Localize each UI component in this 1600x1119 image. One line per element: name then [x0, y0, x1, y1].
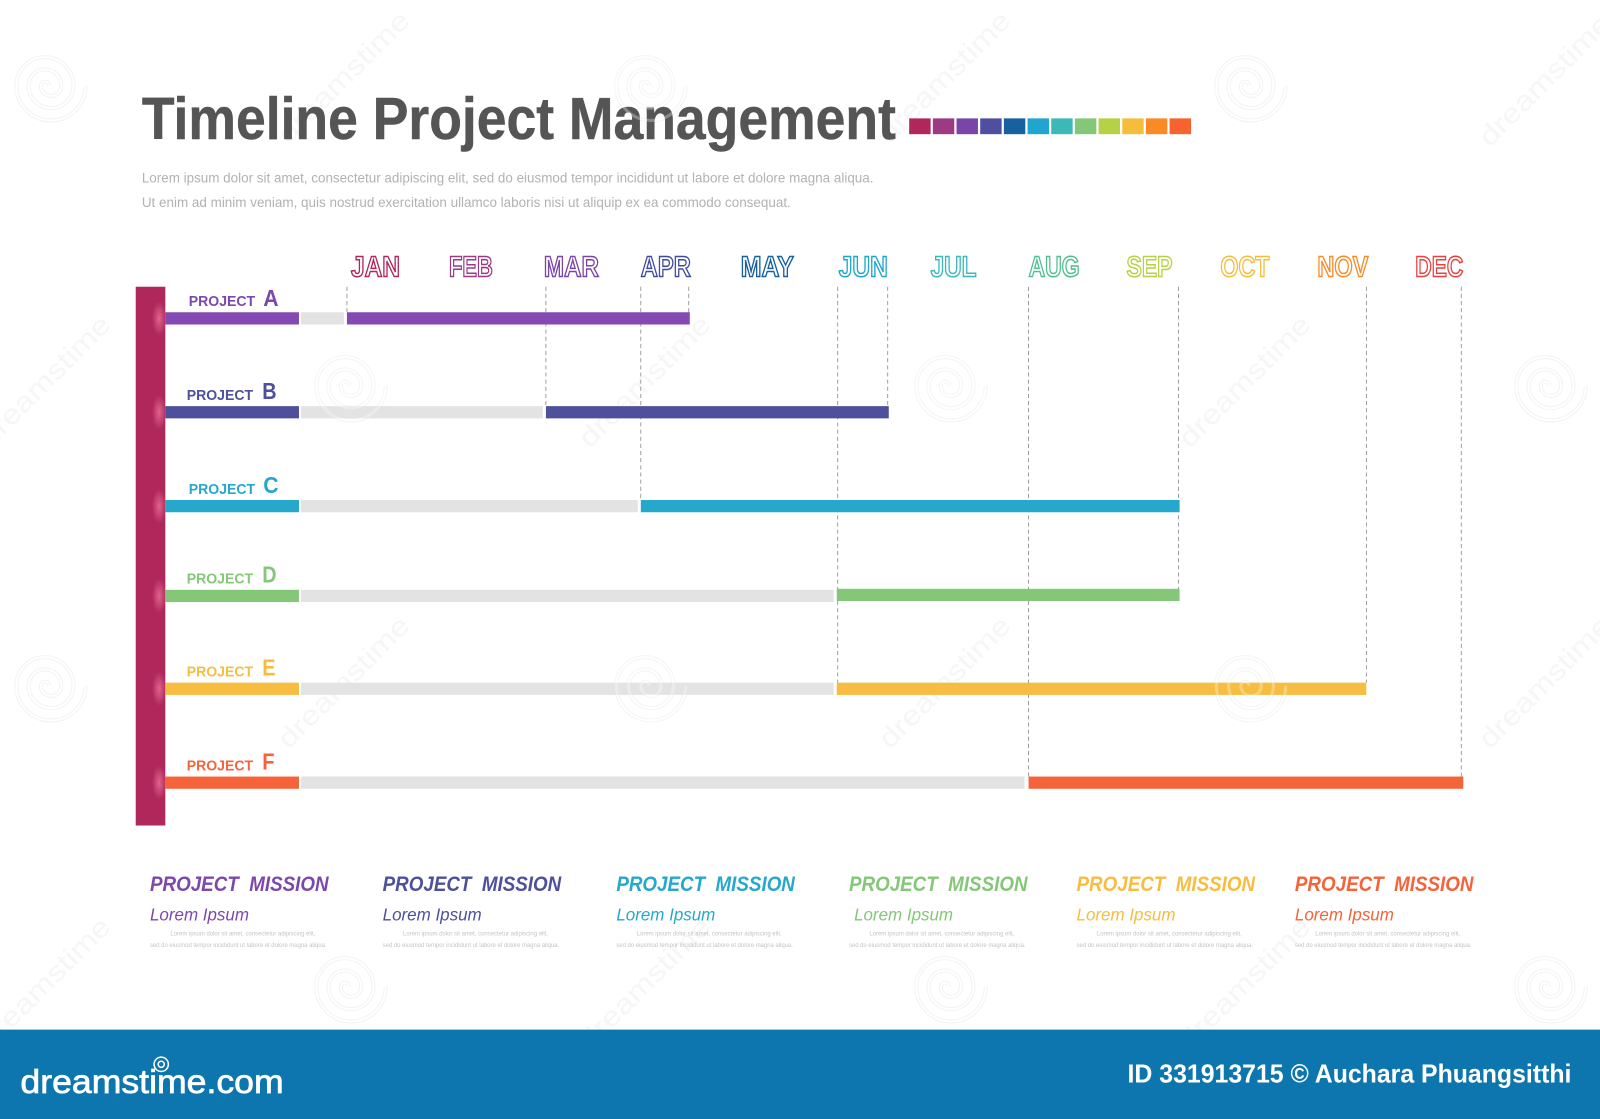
project E row: PROJECT — [187, 665, 253, 681]
month headers: OCT — [1220, 252, 1270, 284]
month headers: MAY — [741, 252, 794, 284]
month headers: MAR — [544, 252, 599, 284]
watermark pattern: dreamstime — [271, 610, 416, 754]
mission F: sed do eiusmod tempor incididunt ut labore et dolore magna aliqua. — [1295, 942, 1472, 949]
mission F — [1295, 872, 1474, 949]
watermark pattern: dreamstime — [572, 309, 717, 453]
dashed month guide lines — [347, 287, 1461, 777]
month headers: DEC — [1415, 252, 1463, 284]
mission E — [1077, 872, 1256, 949]
mission D — [849, 872, 1028, 949]
mission D: PROJECT MISSION — [849, 872, 1028, 896]
mission C — [616, 872, 795, 949]
watermark pattern: dreamstime — [1472, 610, 1600, 754]
project D row: D — [262, 562, 277, 588]
mission D: Lorem ipsum dolor sit amet, consectetur adipiscing elit, — [869, 931, 1015, 938]
project F row — [165, 748, 1463, 789]
mission E: Lorem Ipsum — [1077, 904, 1176, 924]
month headers: NOV — [1317, 252, 1368, 284]
mission C: Lorem Ipsum — [616, 904, 715, 924]
watermark pattern: dreamstime — [872, 5, 1017, 149]
icon: logo spiral — [154, 1057, 168, 1071]
month headers: JAN — [351, 252, 400, 284]
watermark pattern: dreamstime — [572, 911, 717, 1055]
mission A: Lorem Ipsum — [150, 904, 249, 924]
description text: Ut enim ad minim veniam, quis nostrud exercitation ullamco laboris nisi ut aliquip ex ea commodo consequat. — [142, 195, 791, 211]
footer band — [0, 1030, 1600, 1119]
watermark pattern: dreamstime — [1172, 309, 1317, 453]
project C row: C — [263, 472, 279, 498]
mission B: PROJECT MISSION — [383, 872, 562, 896]
month headers: JUL — [931, 252, 977, 284]
project A row: A — [263, 285, 279, 311]
mission E: PROJECT MISSION — [1077, 872, 1256, 896]
logo wordmark: dreamstime.com — [20, 1064, 284, 1101]
mission F: Lorem ipsum dolor sit amet, consectetur adipiscing elit, — [1315, 931, 1460, 938]
project F row: F — [262, 748, 274, 774]
mission C: sed do eiusmod tempor incididunt ut labore et dolore magna aliqua. — [616, 942, 793, 949]
project B row: B — [262, 378, 277, 404]
watermark pattern: dreamstime — [1172, 911, 1317, 1055]
watermark overlay on bars and title — [316, 57, 1286, 720]
month headers — [351, 252, 1463, 284]
image credit: ID 331913715 © Auchara Phuangsitthi — [1128, 1061, 1571, 1089]
mission E: sed do eiusmod tempor incididunt ut labore et dolore magna aliqua. — [1077, 942, 1253, 949]
month headers: APR — [641, 252, 691, 284]
mission C: PROJECT MISSION — [616, 872, 795, 896]
project D row — [165, 562, 1180, 602]
project E row: E — [262, 655, 276, 681]
project D row: PROJECT — [187, 572, 253, 588]
title: Timeline Project Management — [142, 85, 896, 152]
month headers: JUN — [839, 252, 888, 284]
project A row: PROJECT — [189, 294, 255, 310]
mission B: Lorem Ipsum — [383, 904, 482, 924]
mission D: sed do eiusmod tempor incididunt ut labore et dolore magna aliqua. — [849, 942, 1026, 949]
month headers: AUG — [1029, 252, 1080, 284]
mission B: Lorem ipsum dolor sit amet, consectetur adipiscing elit, — [403, 931, 548, 938]
project C row — [165, 472, 1180, 512]
mission A — [150, 872, 329, 949]
mission B — [383, 872, 562, 949]
project B row: PROJECT — [187, 388, 253, 404]
mission A: Lorem ipsum dolor sit amet, consectetur adipiscing elit, — [170, 931, 316, 938]
project A row — [165, 285, 690, 324]
description text: Lorem ipsum dolor sit amet, consectetur adipiscing elit, sed do eiusmod tempor incididunt ut labore et dolore magna aliqua. — [142, 171, 873, 187]
month headers: FEB — [449, 252, 493, 284]
project C row: PROJECT — [189, 482, 255, 498]
watermark pattern: dreamstime — [872, 610, 1017, 754]
project E row — [165, 655, 1366, 695]
mission A: sed do eiusmod tempor incididunt ut labore et dolore magna aliqua. — [150, 942, 327, 949]
mission C: Lorem ipsum dolor sit amet, consectetur adipiscing elit, — [637, 931, 782, 938]
mission B: sed do eiusmod tempor incididunt ut labore et dolore magna aliqua. — [383, 942, 559, 949]
mission F: PROJECT MISSION — [1295, 872, 1474, 896]
watermark pattern: dreamstime — [271, 5, 416, 149]
mission E: Lorem ipsum dolor sit amet, consectetur adipiscing elit, — [1097, 931, 1242, 938]
mission D: Lorem Ipsum — [854, 904, 953, 924]
colour swatch strip — [909, 118, 1191, 134]
project B row — [165, 378, 889, 418]
mission A: PROJECT MISSION — [150, 872, 329, 896]
mission F: Lorem Ipsum — [1295, 904, 1394, 924]
description text — [142, 171, 873, 211]
month headers: SEP — [1127, 252, 1172, 284]
watermark pattern: dreamstime — [1472, 8, 1600, 152]
project F row: PROJECT — [187, 758, 253, 774]
vertical project spine — [136, 287, 166, 826]
